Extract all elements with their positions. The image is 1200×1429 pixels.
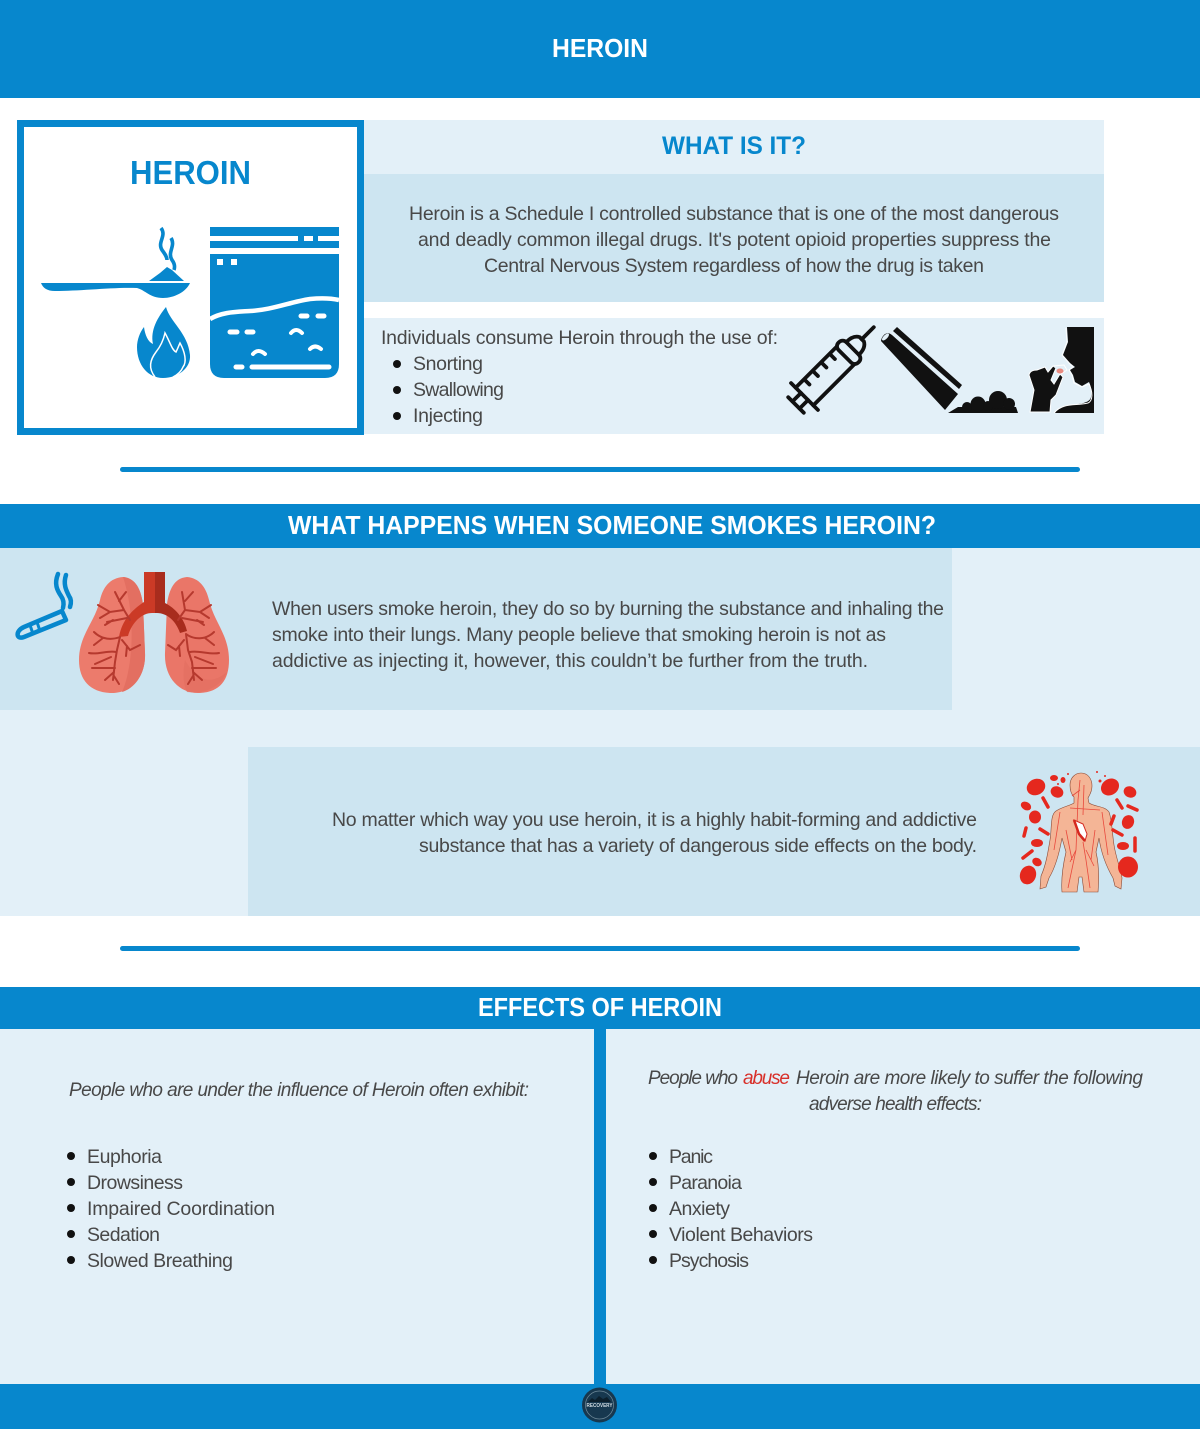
list: adverse effects	[649, 1146, 813, 1272]
icon: body with blood cells	[1017, 771, 1138, 892]
heading band: what happens when someone smokes heroin	[0, 504, 1200, 548]
icon: syringe	[783, 314, 887, 418]
heading band: effects of heroin	[0, 987, 1200, 1029]
heading: heroin: HEROIN	[130, 154, 251, 191]
intro text: abuse	[743, 1068, 790, 1089]
panel: dangerous side effects	[248, 747, 1200, 916]
list: immediate effects: Slowed Breathing	[87, 1250, 233, 1272]
title: HEROIN	[552, 33, 648, 63]
text block: how consumed: Swallowing	[413, 379, 504, 401]
footer band	[0, 1384, 1200, 1429]
text block: how consumed: Individuals consume Heroin through the use of:	[381, 327, 778, 349]
top header band	[0, 0, 1200, 98]
icon: spoon over flame	[41, 228, 190, 378]
text block: definition: Heroin is a Schedule I controlled substance that is one of the most dangerous	[409, 203, 1059, 225]
list: immediate effects: Drowsiness	[87, 1172, 183, 1194]
panel: smoking explanation	[0, 548, 952, 710]
list: adverse effects: Psychosis	[669, 1250, 749, 1272]
panel: what is it	[364, 120, 1104, 302]
list: adverse effects: Violent Behaviors	[669, 1224, 813, 1246]
list: adverse effects: Paranoia	[669, 1172, 742, 1194]
text block: definition: Central Nervous System regardless of how the drug is taken	[484, 255, 984, 277]
logo badge: RECOVERY	[586, 1403, 613, 1409]
panel: routes of use	[364, 314, 1104, 434]
panel: effects under the influence	[0, 1029, 594, 1384]
intro text: adverse health effects:	[809, 1094, 982, 1115]
text block: smoking: addictive as injecting it, however, this couldn’t be further from the truth.	[272, 650, 868, 672]
intro text	[648, 1068, 1143, 1115]
text block: habit forming	[332, 809, 977, 857]
text block: smoking: When users smoke heroin, they do so by burning the substance and inhaling the	[272, 598, 944, 620]
text block: definition: and deadly common illegal drugs. It's potent opioid properties suppress the	[418, 229, 1051, 251]
icon: lungs	[79, 572, 229, 693]
text block: smoking	[272, 598, 944, 672]
list: immediate effects: Impaired Coordination	[87, 1198, 275, 1220]
text block: how consumed	[381, 327, 778, 427]
icon: zip bag of powder	[210, 227, 339, 378]
heading band: effects of heroin: EFFECTS OF HEROIN	[478, 992, 722, 1022]
text block: habit forming: No matter which way you use heroin, it is a highly habit-forming and addictive	[332, 809, 977, 831]
center column divider	[594, 1029, 606, 1384]
icon: cigarette	[18, 574, 71, 638]
divider 2	[120, 946, 1080, 951]
icon: person taking pill	[1029, 327, 1094, 413]
panel: heroin icon box	[20, 124, 360, 432]
divider 1	[120, 467, 1080, 472]
text block: how consumed: Snorting	[413, 353, 483, 375]
intro text: People who	[648, 1068, 738, 1089]
panel: effects of abuse	[606, 1029, 1200, 1384]
icon: rolled tube and powder	[881, 327, 1018, 413]
list: adverse effects: Panic	[669, 1146, 713, 1168]
logo badge	[582, 1388, 617, 1422]
heading: what is it: WHAT IS IT?	[662, 132, 806, 160]
list: immediate effects: Euphoria	[87, 1146, 162, 1168]
list: immediate effects	[67, 1146, 275, 1272]
list: immediate effects: Sedation	[87, 1224, 160, 1246]
text block: habit forming: substance that has a variety of dangerous side effects on the body.	[419, 835, 977, 857]
light background for smoking section	[0, 548, 1200, 916]
heading band: what happens when someone smokes heroin: WHAT HAPPENS WHEN SOMEONE SMOKES HEROIN?	[288, 510, 936, 540]
text block: definition	[409, 203, 1059, 277]
text block: how consumed: Injecting	[413, 405, 483, 427]
text block: smoking: smoke into their lungs. Many people believe that smoking heroin is not as	[272, 624, 886, 646]
list: adverse effects: Anxiety	[669, 1198, 730, 1220]
intro text: People who are under the influence of Heroin often exhibit:	[69, 1080, 529, 1101]
intro text: Heroin are more likely to suffer the following	[796, 1068, 1143, 1089]
